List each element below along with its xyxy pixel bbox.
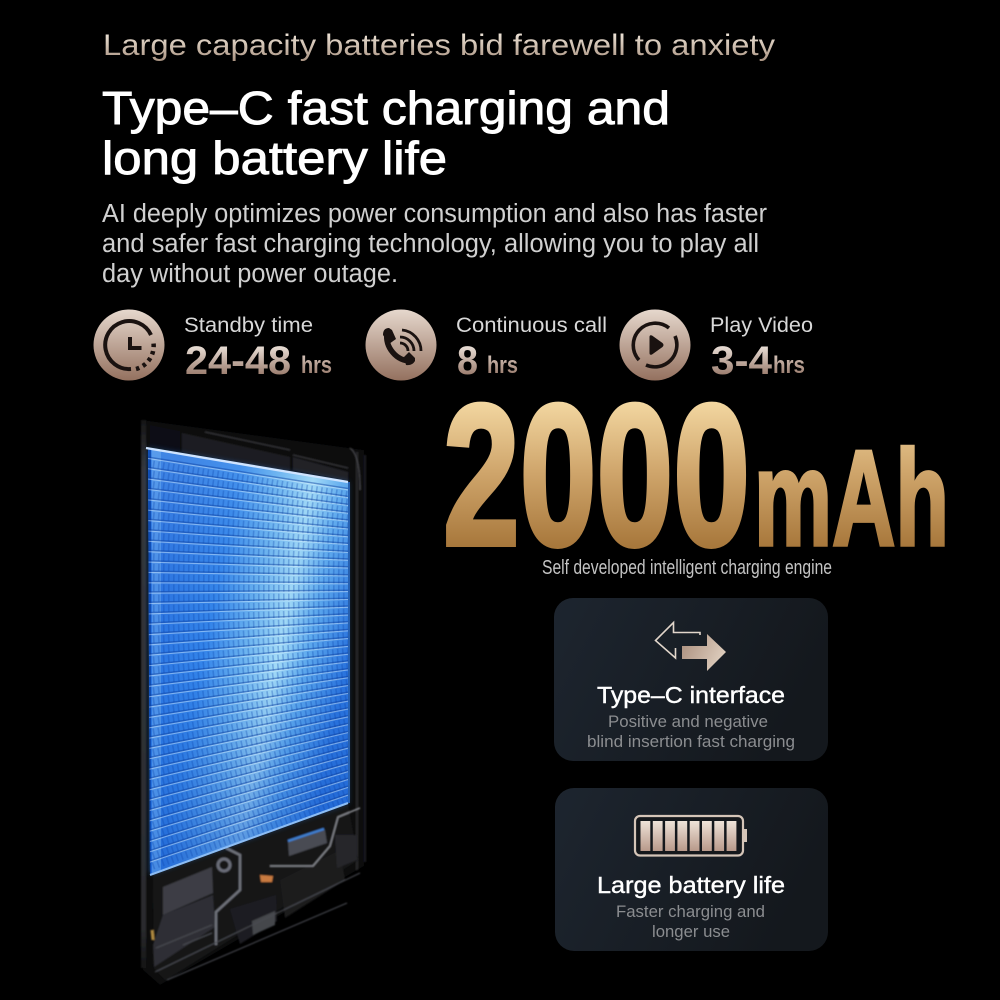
stat: continuous call [366,310,607,383]
stat: play video: hrs [773,352,805,379]
title [102,82,670,184]
panel: Type-C interface: blind insertion fast charging [587,733,795,751]
battery cells [146,445,349,880]
panel: Type-C interface: Positive and negative [608,713,768,731]
icon: phone call [366,310,436,380]
stat: play video: Play Video [710,314,813,337]
stat: standby time: 24-48 [185,339,291,383]
phone body [142,420,365,985]
2000mAh capacity figure: 2000 [443,362,750,588]
panel: Large battery life: longer use [652,923,730,941]
icon: reversible arrows [656,622,726,671]
title: Type–C fast charging and [102,82,670,134]
description text: AI deeply optimizes power consumption and also has faster [102,200,767,228]
stat: standby time [94,310,332,383]
stat: play video [620,310,813,383]
description text [102,200,767,288]
description text: and safer fast charging technology, allowing you to play all [102,230,759,258]
panel: Large battery life: Faster charging and [616,903,765,921]
icon: clock [94,310,164,380]
phone cutaway with battery [142,420,365,985]
lower phone internals [152,805,360,980]
panel: Type-C interface: Type–C interface [597,682,785,708]
stat: standby time: hrs [301,352,332,379]
icon: play [620,310,690,380]
panel: Type-C interface [554,598,828,761]
panel: Large battery life [555,788,828,951]
stat: continuous call: Continuous call [456,314,607,337]
stat: standby time: Standby time [184,314,313,337]
stat: continuous call: 8 [457,339,478,383]
stat: play video: 3-4 [711,339,773,383]
stat: continuous call: hrs [487,352,518,379]
title: long battery life [102,132,447,184]
description text: day without power outage. [102,260,398,288]
capacity caption: Self developed intelligent charging engine [542,557,832,579]
tagline: Large capacity batteries bid farewell to anxiety [103,29,775,62]
icon: battery [635,816,747,856]
panel: Large battery life: Large battery life [597,872,785,898]
